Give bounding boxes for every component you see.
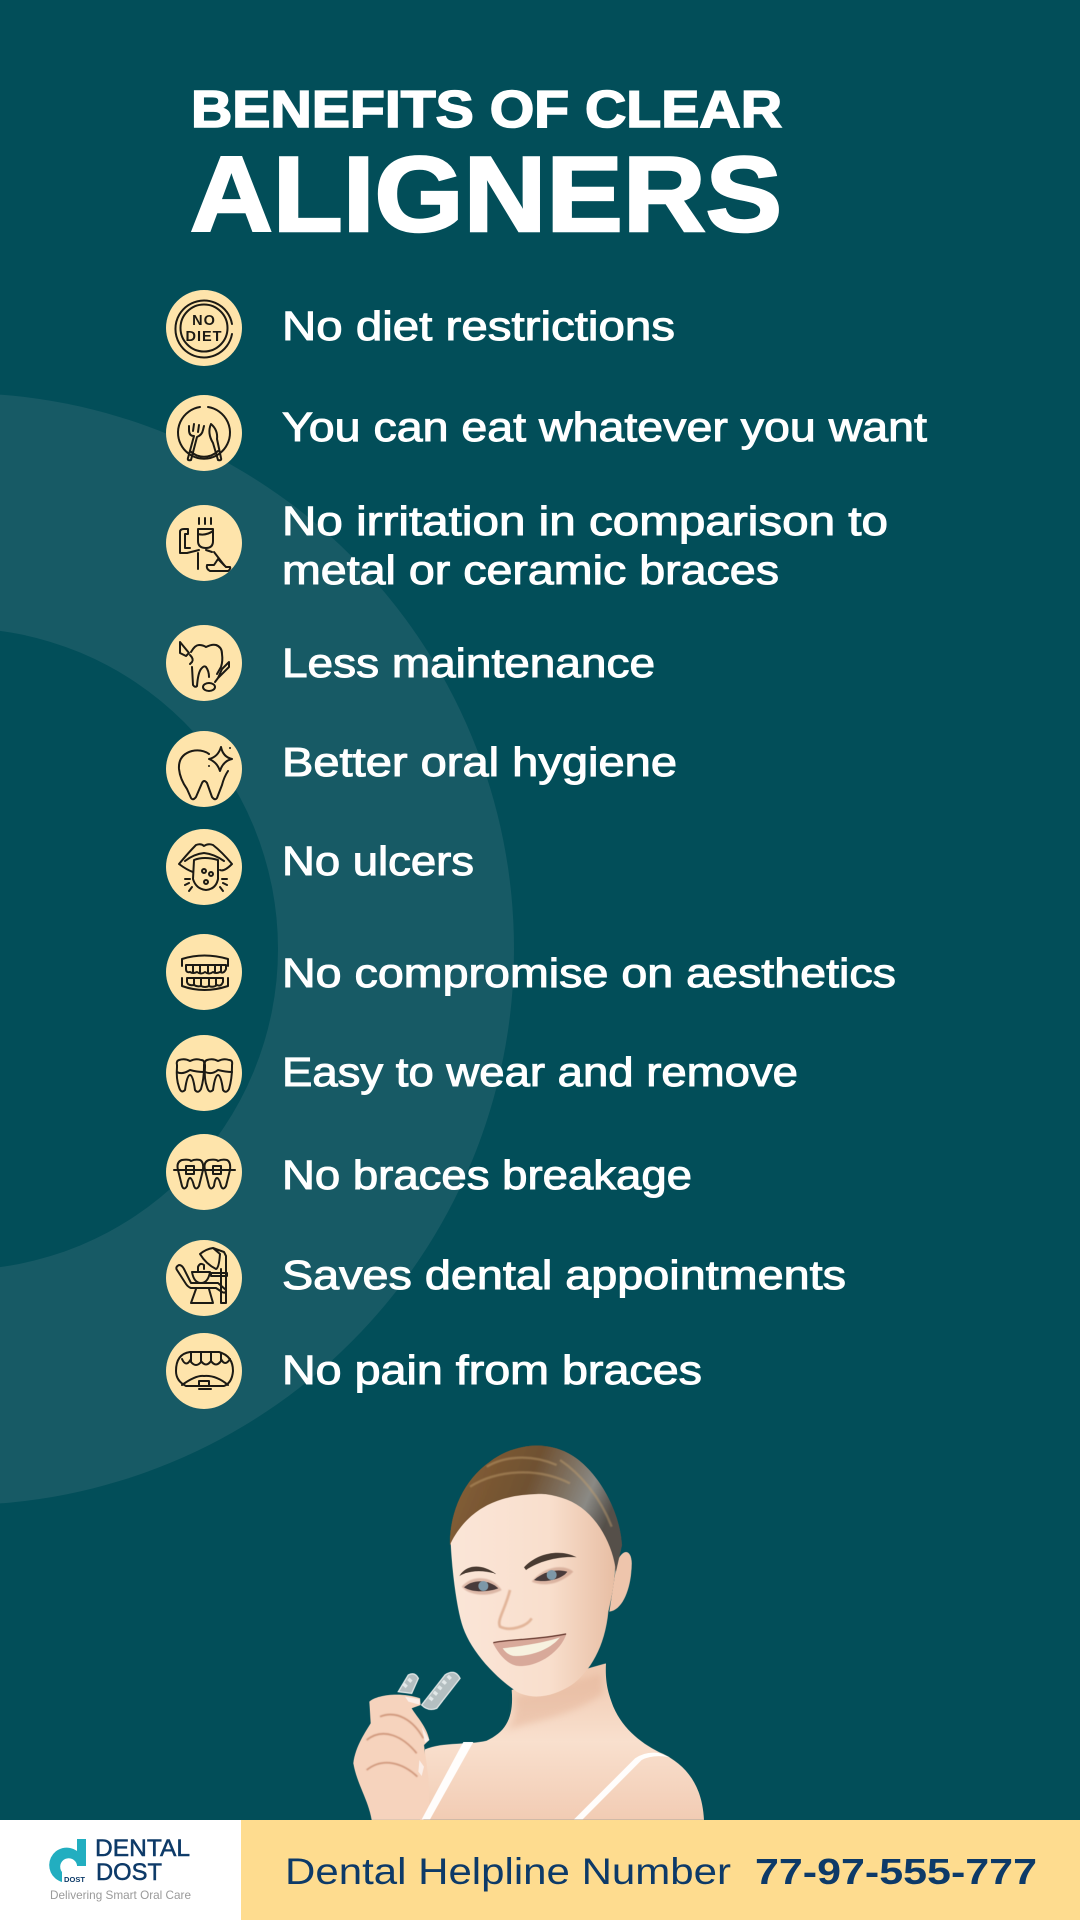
icon: no diet plate: DIET [185, 329, 223, 345]
label: Easy to wear and remove [282, 1049, 798, 1095]
icon: plate with fork and knife [166, 395, 242, 471]
shoulders and neck [420, 1663, 704, 1820]
label: No diet restrictions [282, 303, 675, 349]
helpline bar [241, 1820, 1080, 1920]
logo mark: d [49, 1839, 86, 1884]
label: No compromise on aesthetics [282, 950, 896, 996]
item: saves dental appointments [166, 1240, 846, 1316]
icon: sparkling tooth [166, 731, 242, 807]
item: no irritation: metal or ceramic braces [282, 547, 779, 593]
title: ALIGNERS [190, 134, 782, 254]
icon: teeth with braces [166, 1134, 242, 1210]
item: no compromise on aesthetics [166, 934, 896, 1010]
straps [422, 1742, 670, 1819]
label: Saves dental appointments [282, 1252, 846, 1298]
footer [0, 1820, 1080, 1920]
label: No ulcers [282, 838, 474, 884]
label: No pain from braces [282, 1347, 702, 1393]
eyebrows [459, 1553, 577, 1576]
face [451, 1494, 615, 1697]
nails [405, 1697, 429, 1776]
icon: braces in mouth [166, 1333, 242, 1409]
nose [499, 1590, 532, 1629]
logo wordmark: DENTAL [95, 1835, 190, 1862]
helpline label: Dental Helpline Number [285, 1851, 731, 1892]
smile [493, 1633, 567, 1666]
phone number: 77-97-555-777 [755, 1851, 1037, 1892]
item: no diet restrictions [166, 290, 675, 366]
item: no pain from braces [166, 1333, 702, 1409]
icon: two teeth with aligner [166, 1035, 242, 1111]
icon: no diet plate [166, 290, 242, 366]
title: BENEFITS OF CLEAR [191, 81, 782, 139]
label: No braces breakage [282, 1152, 692, 1198]
aligner [398, 1672, 460, 1709]
eye makeup [462, 1567, 573, 1595]
item: no ulcers [166, 829, 474, 905]
item: easy to wear and remove [166, 1035, 798, 1111]
tagline: Delivering Smart Oral Care [50, 1888, 191, 1902]
hand [353, 1695, 429, 1820]
item: less maintenance [166, 625, 655, 701]
label: No irritation in comparison to [282, 498, 888, 544]
icon: no diet plate: NO [192, 313, 216, 329]
logo wordmark line 2: DOST [96, 1859, 162, 1886]
item: eat whatever [166, 395, 928, 471]
label: Better oral hygiene [282, 739, 677, 785]
icon: tongue with ulcers [166, 829, 242, 905]
ear [609, 1552, 632, 1612]
title [190, 81, 782, 254]
icon: dental chair [166, 1240, 242, 1316]
icon: irritated person [166, 505, 242, 581]
benefits list [166, 290, 928, 1409]
footer logo panel [0, 1820, 241, 1920]
icon: tooth with brush and mirror [166, 625, 242, 701]
label: You can eat whatever you want [282, 404, 928, 450]
item: better oral hygiene [166, 731, 677, 807]
hair front [450, 1446, 622, 1572]
back of hair [450, 1446, 622, 1572]
woman holding clear aligner [353, 1446, 704, 1820]
label: Less maintenance [282, 640, 655, 686]
eyes [464, 1581, 498, 1591]
logo mark: d: DOST [64, 1875, 85, 1884]
decorative concentric arcs [0, 393, 514, 1505]
icon: dentures [166, 934, 242, 1010]
item: no braces breakage [166, 1134, 692, 1210]
item: no irritation [166, 498, 888, 593]
